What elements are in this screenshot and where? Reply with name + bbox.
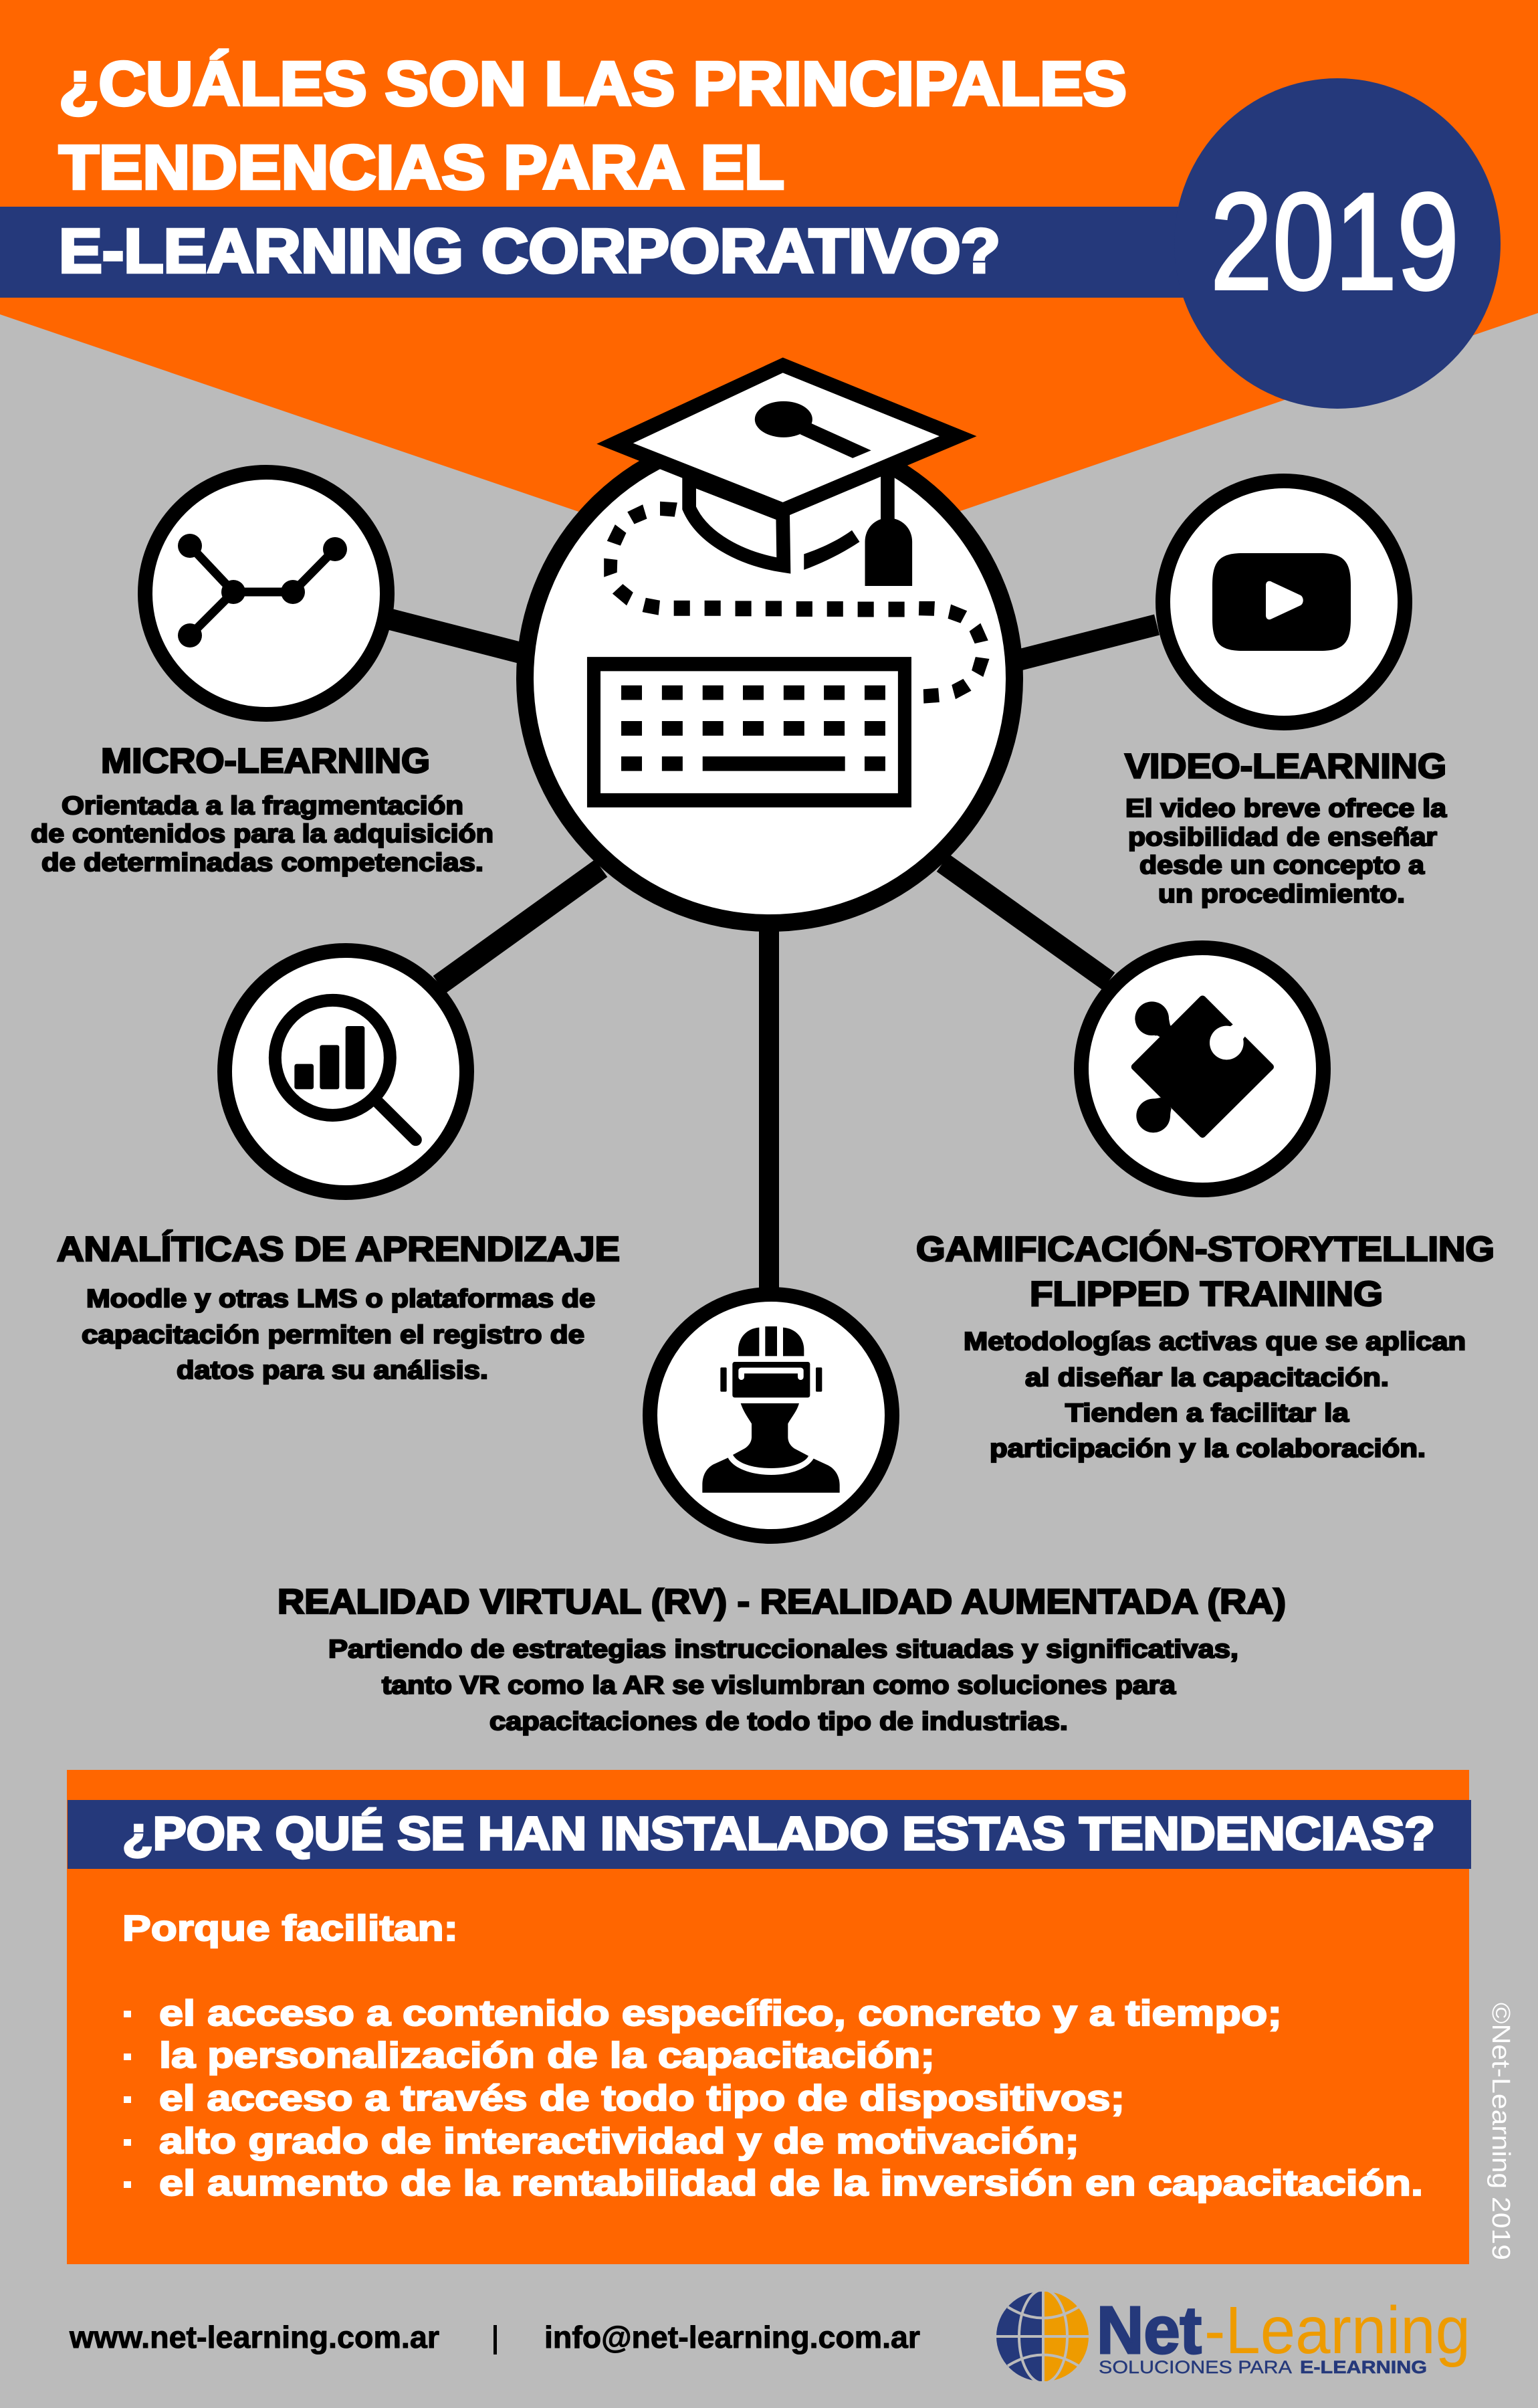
reasons list: alto grado de interactividad y de motivación;	[159, 2121, 1079, 2161]
icon: video play	[1212, 553, 1351, 651]
footer divider	[493, 2325, 497, 2354]
gamification heading: GAMIFICACIÓN-STORYTELLING	[916, 1230, 1495, 1269]
micro-learning text	[31, 792, 493, 877]
micro-learning text: de contenidos para la adquisición	[31, 820, 493, 848]
virtual reality circle	[650, 1294, 892, 1536]
reasons list: el aumento de la rentabilidad de la inversión en capacitación.	[159, 2163, 1423, 2203]
virtual reality heading: REALIDAD VIRTUAL (RV) - REALIDAD AUMENTADA (RA)	[278, 1583, 1286, 1621]
central circle with cap and keyboard	[525, 357, 1014, 923]
icon: magnifier with bars	[275, 1000, 416, 1140]
panel: why these trends	[67, 1770, 1471, 2264]
orange header background	[0, 0, 1538, 577]
gamification heading	[916, 1230, 1495, 1314]
analytics text: datos para su análisis.	[177, 1357, 488, 1385]
logo: Net-Learning	[996, 2290, 1470, 2383]
virtual reality text: tanto VR como la AR se vislumbran como soluciones para	[382, 1672, 1176, 1700]
virtual reality text: capacitaciones de todo tipo de industrias.	[489, 1708, 1068, 1736]
micro-learning text: Orientada a la fragmentación	[62, 792, 463, 820]
video-learning text: un procedimiento.	[1158, 880, 1405, 908]
gamification heading: FLIPPED TRAINING	[1030, 1275, 1383, 1314]
panel heading band	[68, 1800, 1471, 1869]
logo tagline: E-LEARNING	[1300, 2357, 1427, 2377]
video-learning circle	[1163, 481, 1405, 723]
panel heading band: ¿POR QUÉ SE HAN INSTALADO ESTAS TENDENCIAS?	[122, 1807, 1435, 1860]
icon: graduation cap, path and keyboard	[587, 357, 989, 807]
title: ¿CUÁLES SON LAS PRINCIPALES	[59, 49, 1127, 118]
title: TENDENCIAS PARA EL	[59, 132, 784, 202]
virtual reality text	[328, 1635, 1238, 1736]
icon: puzzle piece	[1135, 999, 1271, 1134]
analytics text	[82, 1285, 595, 1385]
logo: Net-Learning: -Learning	[1204, 2293, 1470, 2368]
video-learning heading: VIDEO-LEARNING	[1125, 747, 1446, 786]
reasons list: el acceso a contenido específico, concreto y a tiempo;	[159, 1993, 1282, 2033]
reasons list: el acceso a través de todo tipo de dispositivos;	[159, 2078, 1125, 2118]
virtual reality text: Partiendo de estrategias instruccionales situadas y significativas,	[328, 1635, 1238, 1664]
title	[59, 49, 1127, 286]
analytics text: capacitación permiten el registro de	[82, 1321, 584, 1349]
analytics circle	[225, 950, 467, 1193]
footer website: www.net-learning.com.ar	[69, 2320, 439, 2354]
logo tagline: SOLUCIONES PARA	[1099, 2357, 1292, 2377]
panel intro: Porque facilitan:	[122, 1908, 458, 1948]
analytics heading: ANALÍTICAS DE APRENDIZAJE	[57, 1230, 620, 1269]
gamification text: al diseñar la capacitación.	[1025, 1364, 1389, 1392]
logo wordmark: Net	[1097, 2293, 1202, 2368]
video-learning text: desde un concepto a	[1139, 851, 1425, 880]
year badge	[1174, 78, 1501, 409]
year badge: 2019	[1210, 165, 1459, 318]
micro-learning text: de determinadas competencias.	[41, 849, 483, 877]
micro-learning circle	[145, 472, 387, 714]
gamification circle	[1081, 948, 1323, 1190]
logo tagline	[1099, 2357, 1427, 2377]
gamification text: Metodologías activas que se aplican	[964, 1328, 1466, 1356]
video-learning text: El video breve ofrece la	[1125, 795, 1447, 823]
icon: person with VR headset	[702, 1326, 840, 1493]
reasons list	[124, 1993, 1423, 2203]
video-learning text	[1125, 795, 1447, 908]
reasons list: la personalización de la capacitación;	[159, 2035, 935, 2076]
gamification text: Tienden a facilitar la	[1065, 1399, 1349, 1427]
title: E-LEARNING CORPORATIVO?	[59, 216, 1000, 286]
footer email: info@net-learning.com.ar	[544, 2320, 920, 2354]
copyright vertical text: ©Net-Learning 2019	[1487, 2003, 1515, 2260]
connector spokes	[391, 619, 1157, 1294]
gamification text: participación y la colaboración.	[990, 1435, 1426, 1463]
icon: globe	[996, 2290, 1090, 2383]
micro-learning heading: MICRO-LEARNING	[101, 742, 430, 781]
analytics text: Moodle y otras LMS o plataformas de	[86, 1285, 595, 1313]
gamification text	[964, 1328, 1466, 1463]
navy title band	[0, 207, 1197, 298]
icon: molecule network	[178, 534, 347, 647]
video-learning text: posibilidad de enseñar	[1128, 823, 1437, 851]
